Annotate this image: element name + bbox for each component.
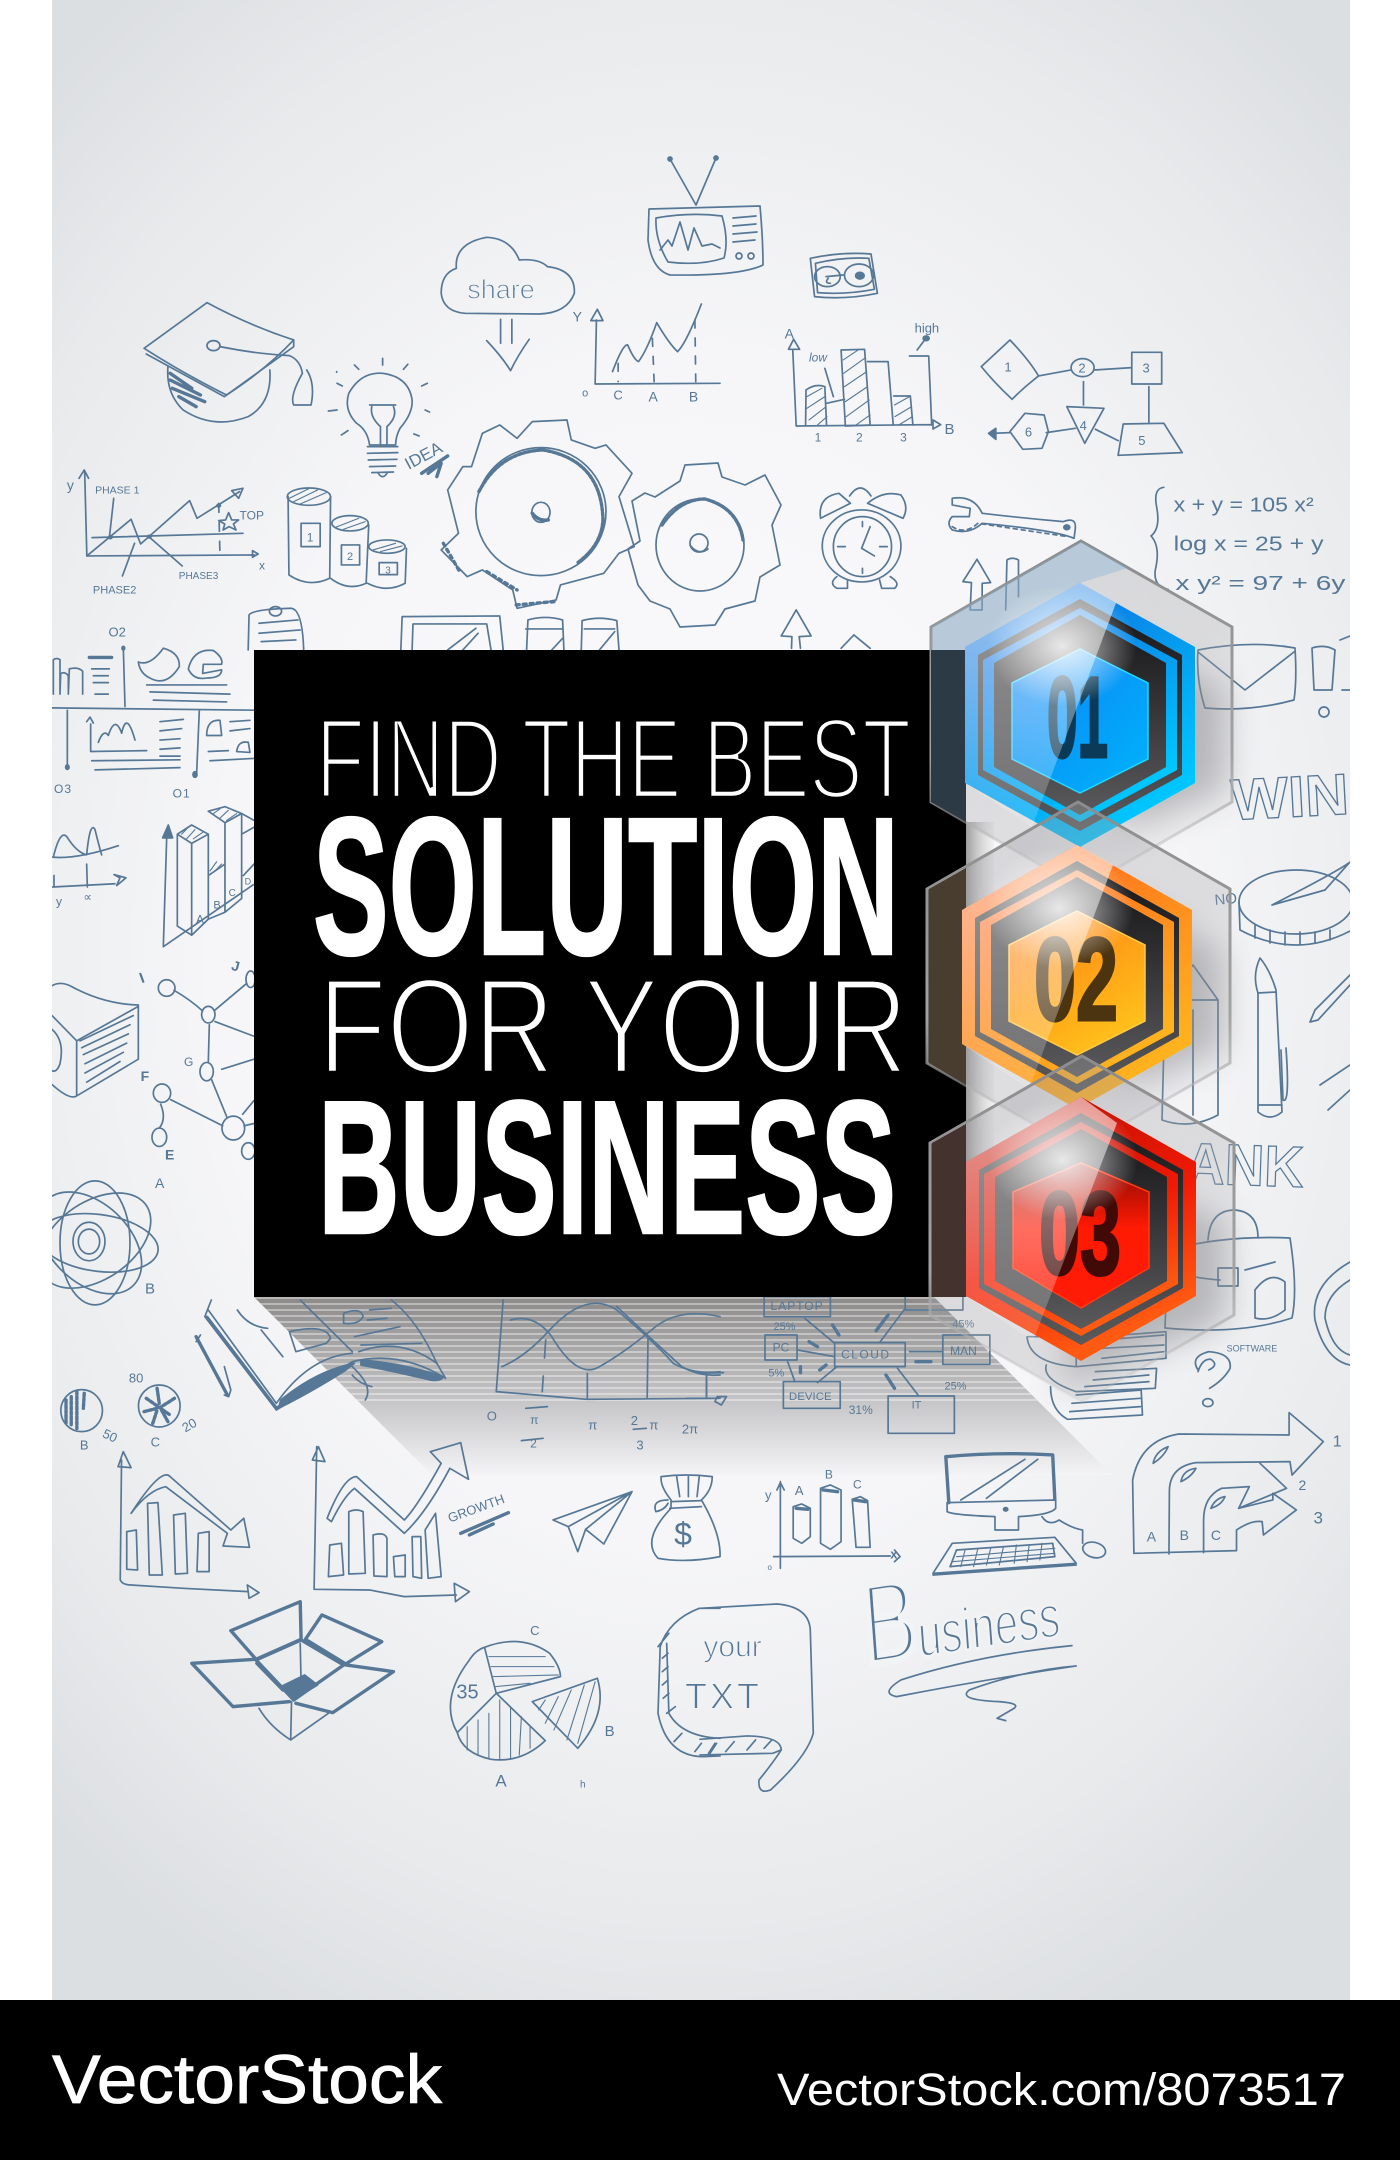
icon: tiny pencil right edge: [1310, 975, 1350, 1110]
equations: [1151, 487, 1345, 595]
icon: disc charts: [61, 1371, 199, 1452]
chart: sine curves: 2: [631, 1413, 638, 1428]
icon: abc arrows: 2: [1299, 1477, 1307, 1493]
diagram: dashboard sheet: [52, 646, 254, 777]
icon: large gear: [441, 420, 634, 608]
icon: numbered cylinders: 1: [307, 531, 314, 545]
chart: growth bars with arrow: [312, 1443, 508, 1602]
icon: abc arrows: A: [1147, 1529, 1157, 1545]
title line: for your: FOR YOUR: [318, 950, 908, 1102]
hexagon 02: orange: [927, 802, 1230, 1150]
handwritten word: business: Business: [858, 1533, 1063, 1690]
chart: phase line chart: [67, 470, 265, 596]
icon: disc charts: 20: [179, 1415, 199, 1435]
icon: wrench: [949, 498, 1075, 538]
hollow word: bank: ANK: [1185, 1131, 1305, 1200]
icon: question mark: [1195, 1344, 1277, 1407]
badge 03: [966, 1097, 1196, 1361]
glass plate 02: [927, 802, 1230, 1150]
diagram: node network: [137, 957, 255, 1191]
diagram: node network: G: [184, 1055, 193, 1069]
icon: speech bubble your txt: your: [703, 1631, 762, 1664]
chart: sine curves: 2π: [682, 1421, 698, 1436]
chart: 3d bars: [163, 807, 254, 947]
icon: graduation cap: [144, 303, 313, 422]
chart: sine curves: π: [649, 1417, 658, 1432]
diagram: node network: E: [165, 1146, 174, 1162]
chart: low high bar chart: low: [809, 351, 828, 365]
doodles: lower middle under panel: [487, 1300, 720, 1452]
diagram: flow chart: 2: [1078, 361, 1086, 376]
diagram: cloud mind map: IT: [912, 1399, 922, 1411]
chart: phase line chart: y: [67, 477, 74, 493]
labels: dashboard section numbers: [54, 782, 191, 800]
chart: line chart C A B: Y: [573, 309, 583, 325]
diagram: cloud mind map: 45%: [952, 1318, 974, 1330]
chart: sine curves: π: [530, 1413, 538, 1427]
diagram: cloud mind map: 25%: [774, 1321, 796, 1333]
icon: question mark: SOFTWARE: [1227, 1344, 1277, 1354]
icon: abc arrows: 3: [1313, 1508, 1323, 1527]
chart: curve alpha: y: [56, 894, 62, 908]
chart: 3d bars: B: [213, 900, 221, 912]
icon: small cards: [1312, 636, 1350, 717]
chart: declining bars with arrow: [118, 1452, 259, 1598]
icon: alarm clock: [820, 488, 906, 588]
icon: open book with pen: [196, 1300, 446, 1410]
label: section 02: O2: [109, 625, 126, 640]
diagram: cloud mind map: 31%: [849, 1403, 873, 1417]
icon: speech bubble left side: [658, 1608, 720, 1757]
chart: sine curves: O: [487, 1409, 497, 1424]
chart: low high bar chart: high: [915, 321, 939, 336]
chart: 3d bars: A: [196, 913, 204, 927]
icon: abc arrows: [1133, 1413, 1342, 1554]
icon: money bag: $: [674, 1516, 692, 1552]
icon: pie chip: [1214, 862, 1353, 945]
handwritten word: business: [858, 1533, 1076, 1721]
diagram: cloud mind map: [687, 1295, 990, 1433]
chart: sine curves: 2: [530, 1436, 537, 1450]
chart: low high bar chart: 3: [900, 431, 907, 445]
chart: 3d bars: C: [229, 888, 236, 899]
chart: hand drawn pie: 35: [456, 1681, 479, 1703]
chart: low high bar chart: 1: [815, 431, 822, 445]
chart: 3d abc bars: y: [765, 1487, 772, 1502]
icon: money bag: [652, 1475, 720, 1560]
chart: 3d abc bars: [765, 1467, 900, 1572]
chart: hand drawn pie: [450, 1623, 615, 1791]
chart: line chart C A B: [573, 304, 720, 405]
icon: small gear: [628, 463, 781, 627]
chart: 3d abc bars: B: [825, 1467, 833, 1481]
equations: x y² = 97 + 6y: [1175, 573, 1345, 595]
icon: disc charts: 50: [100, 1426, 120, 1445]
chart: low high bar chart: 2: [856, 431, 863, 445]
diagram: node network: I: [137, 970, 147, 987]
diagram: flow chart: [981, 340, 1182, 455]
icon: open box: [192, 1602, 393, 1740]
icon: pie chip: NO: [1214, 890, 1238, 909]
icon: abc arrows: B: [1180, 1527, 1189, 1543]
footer logo: VectorStock: [52, 2041, 443, 2118]
sketch doodle layer: [27, 156, 1353, 1791]
badge 03: 03: [1039, 1168, 1121, 1300]
diagram: cloud mind map: LAPTOP: [771, 1299, 824, 1313]
chart: 3d bars: D: [245, 877, 252, 887]
icon: retro tv: [648, 156, 763, 275]
icon: atom: [27, 1171, 160, 1314]
diagram: node network: J: [230, 957, 242, 975]
title line: solution: SOLUTION: [313, 777, 899, 996]
doodles: lower right: [685, 1295, 1342, 1791]
diagram: flow chart: 6: [1025, 425, 1032, 440]
diagram: flow chart: 5: [1138, 433, 1145, 448]
icon: disc charts: C: [151, 1435, 160, 1450]
icon: abc arrows: 1: [1333, 1434, 1342, 1451]
chart: sine curves: π: [588, 1417, 597, 1432]
labels: dashboard section numbers: O3: [54, 782, 72, 796]
icon: large pencil: [1162, 965, 1218, 1124]
icon: disc charts: 80: [129, 1371, 143, 1386]
doodles: left column: [27, 646, 255, 1314]
icon: numbered cylinders: 2: [347, 551, 353, 563]
chart: curve alpha: ∝: [83, 890, 92, 904]
labels: dashboard section numbers: O1: [173, 786, 191, 800]
chart: phase line chart: PHASE2: [93, 584, 136, 596]
icon: clipboard: [248, 607, 304, 650]
icon: atom: B: [145, 1280, 155, 1297]
icon: share cloud: share: [467, 274, 535, 304]
icon: numbered cylinders: 3: [385, 565, 391, 576]
chart: curve alpha: [53, 828, 126, 908]
chart: line chart C A B: A: [648, 389, 658, 405]
icon: paper plane: [553, 1492, 632, 1552]
diagram: cloud mind map: DEVICE: [789, 1391, 832, 1403]
chart: 3d abc bars: o: [768, 1563, 773, 1572]
badge 02: [962, 845, 1192, 1109]
doodles: lower left: [61, 1300, 720, 1791]
diagram: cloud mind map: CLOUD: [841, 1347, 891, 1361]
icon: stack box: [52, 983, 138, 1097]
chart: line chart C A B: o: [582, 388, 588, 400]
title line: business: BUSINESS: [318, 1062, 896, 1274]
diagram: flow chart: 3: [1142, 361, 1150, 376]
icon: go tag: [810, 253, 877, 298]
glass plate 03: [930, 1056, 1234, 1402]
icon: up arrows: [781, 558, 1018, 648]
chart: hand drawn pie: B: [605, 1723, 615, 1740]
icon: envelope: [1198, 644, 1296, 709]
chart: sine curves: [487, 1300, 720, 1452]
icon: disc charts: B: [80, 1437, 89, 1452]
chart: sine curves: 3: [636, 1437, 644, 1452]
chart: hand drawn pie: A: [495, 1772, 507, 1791]
footer bar: [0, 2000, 1400, 2160]
icon: stacked books: [1027, 1332, 1166, 1419]
icon: briefcase: [1165, 1210, 1295, 1330]
chart: line chart C A B: B: [689, 389, 698, 405]
glass plate 01: [931, 541, 1232, 889]
icon: light bulb with idea label: IDEA: [402, 438, 446, 473]
chart: low high bar chart: A: [785, 325, 795, 341]
diagram: cloud mind map: 25%: [945, 1380, 967, 1392]
chart: phase line chart: TOP: [240, 508, 264, 522]
diagram: flow chart: 1: [1004, 360, 1012, 375]
hexagon 01: blue: [931, 541, 1232, 889]
chart: hand drawn pie: h: [580, 1779, 586, 1790]
icon: desktop computer: [933, 1454, 1109, 1575]
icon: tablet and phones: [401, 616, 619, 650]
icon: speech bubble your txt: [685, 1604, 813, 1791]
icon: numbered cylinders: [287, 488, 406, 588]
icon: wall clock right edge: [1314, 1262, 1350, 1365]
icon: speech bubble your txt: TXT: [685, 1675, 762, 1716]
chart: growth bars with arrow: GROWTH: [446, 1491, 507, 1525]
footer url: VectorStock.com/8073517: [777, 2064, 1346, 2115]
badge 01: 01: [1047, 654, 1108, 782]
soft shadows behind hexagons: [1060, 640, 1225, 1390]
title line: find the best: FIND THE BEST: [316, 696, 911, 823]
diagram: cloud mind map: PC: [773, 1341, 790, 1355]
chart: low high bar chart: [785, 321, 955, 445]
title panel: [254, 650, 966, 1297]
diagram: cloud mind map: 5%: [768, 1368, 785, 1380]
chart: 3d abc bars: C: [853, 1477, 862, 1491]
equations: log x = 25 + y: [1174, 534, 1324, 556]
chart: 3d abc bars: x: [890, 1546, 898, 1561]
doodles: upper left: [67, 237, 720, 650]
icon: small pencil: [1255, 958, 1287, 1117]
diagram: cloud mind map: MAN: [950, 1344, 977, 1358]
diagram: flow chart: 4: [1080, 418, 1087, 433]
diagram: node network: A: [155, 1175, 165, 1191]
equations: x + y = 105 x²: [1174, 495, 1314, 517]
hexagon 03: red: [930, 1056, 1234, 1402]
badge 02: 02: [1034, 914, 1118, 1046]
chart: 3d abc bars: A: [795, 1483, 804, 1498]
icon: light bulb with idea label: [328, 358, 448, 477]
long shadow under panel: [254, 1297, 1112, 1475]
icon: share cloud: [441, 237, 574, 371]
doodles: upper right: [781, 253, 1345, 648]
hollow word: win: WIN: [1229, 762, 1351, 833]
chart: phase line chart: PHASE 1: [95, 484, 140, 496]
icon: abc arrows: C: [1211, 1527, 1221, 1543]
badge 01: [965, 583, 1195, 847]
chart: low high bar chart: B: [945, 421, 955, 438]
side strip between plates: [966, 822, 994, 1297]
chart: phase line chart: PHASE3: [179, 571, 219, 582]
chart: line chart C A B: C: [613, 387, 623, 402]
doodles: real coordinate items: [628, 156, 1353, 1365]
chart: phase line chart: x: [259, 558, 265, 572]
diagram: node network: F: [141, 1068, 150, 1084]
chart: hand drawn pie: C: [530, 1623, 539, 1638]
